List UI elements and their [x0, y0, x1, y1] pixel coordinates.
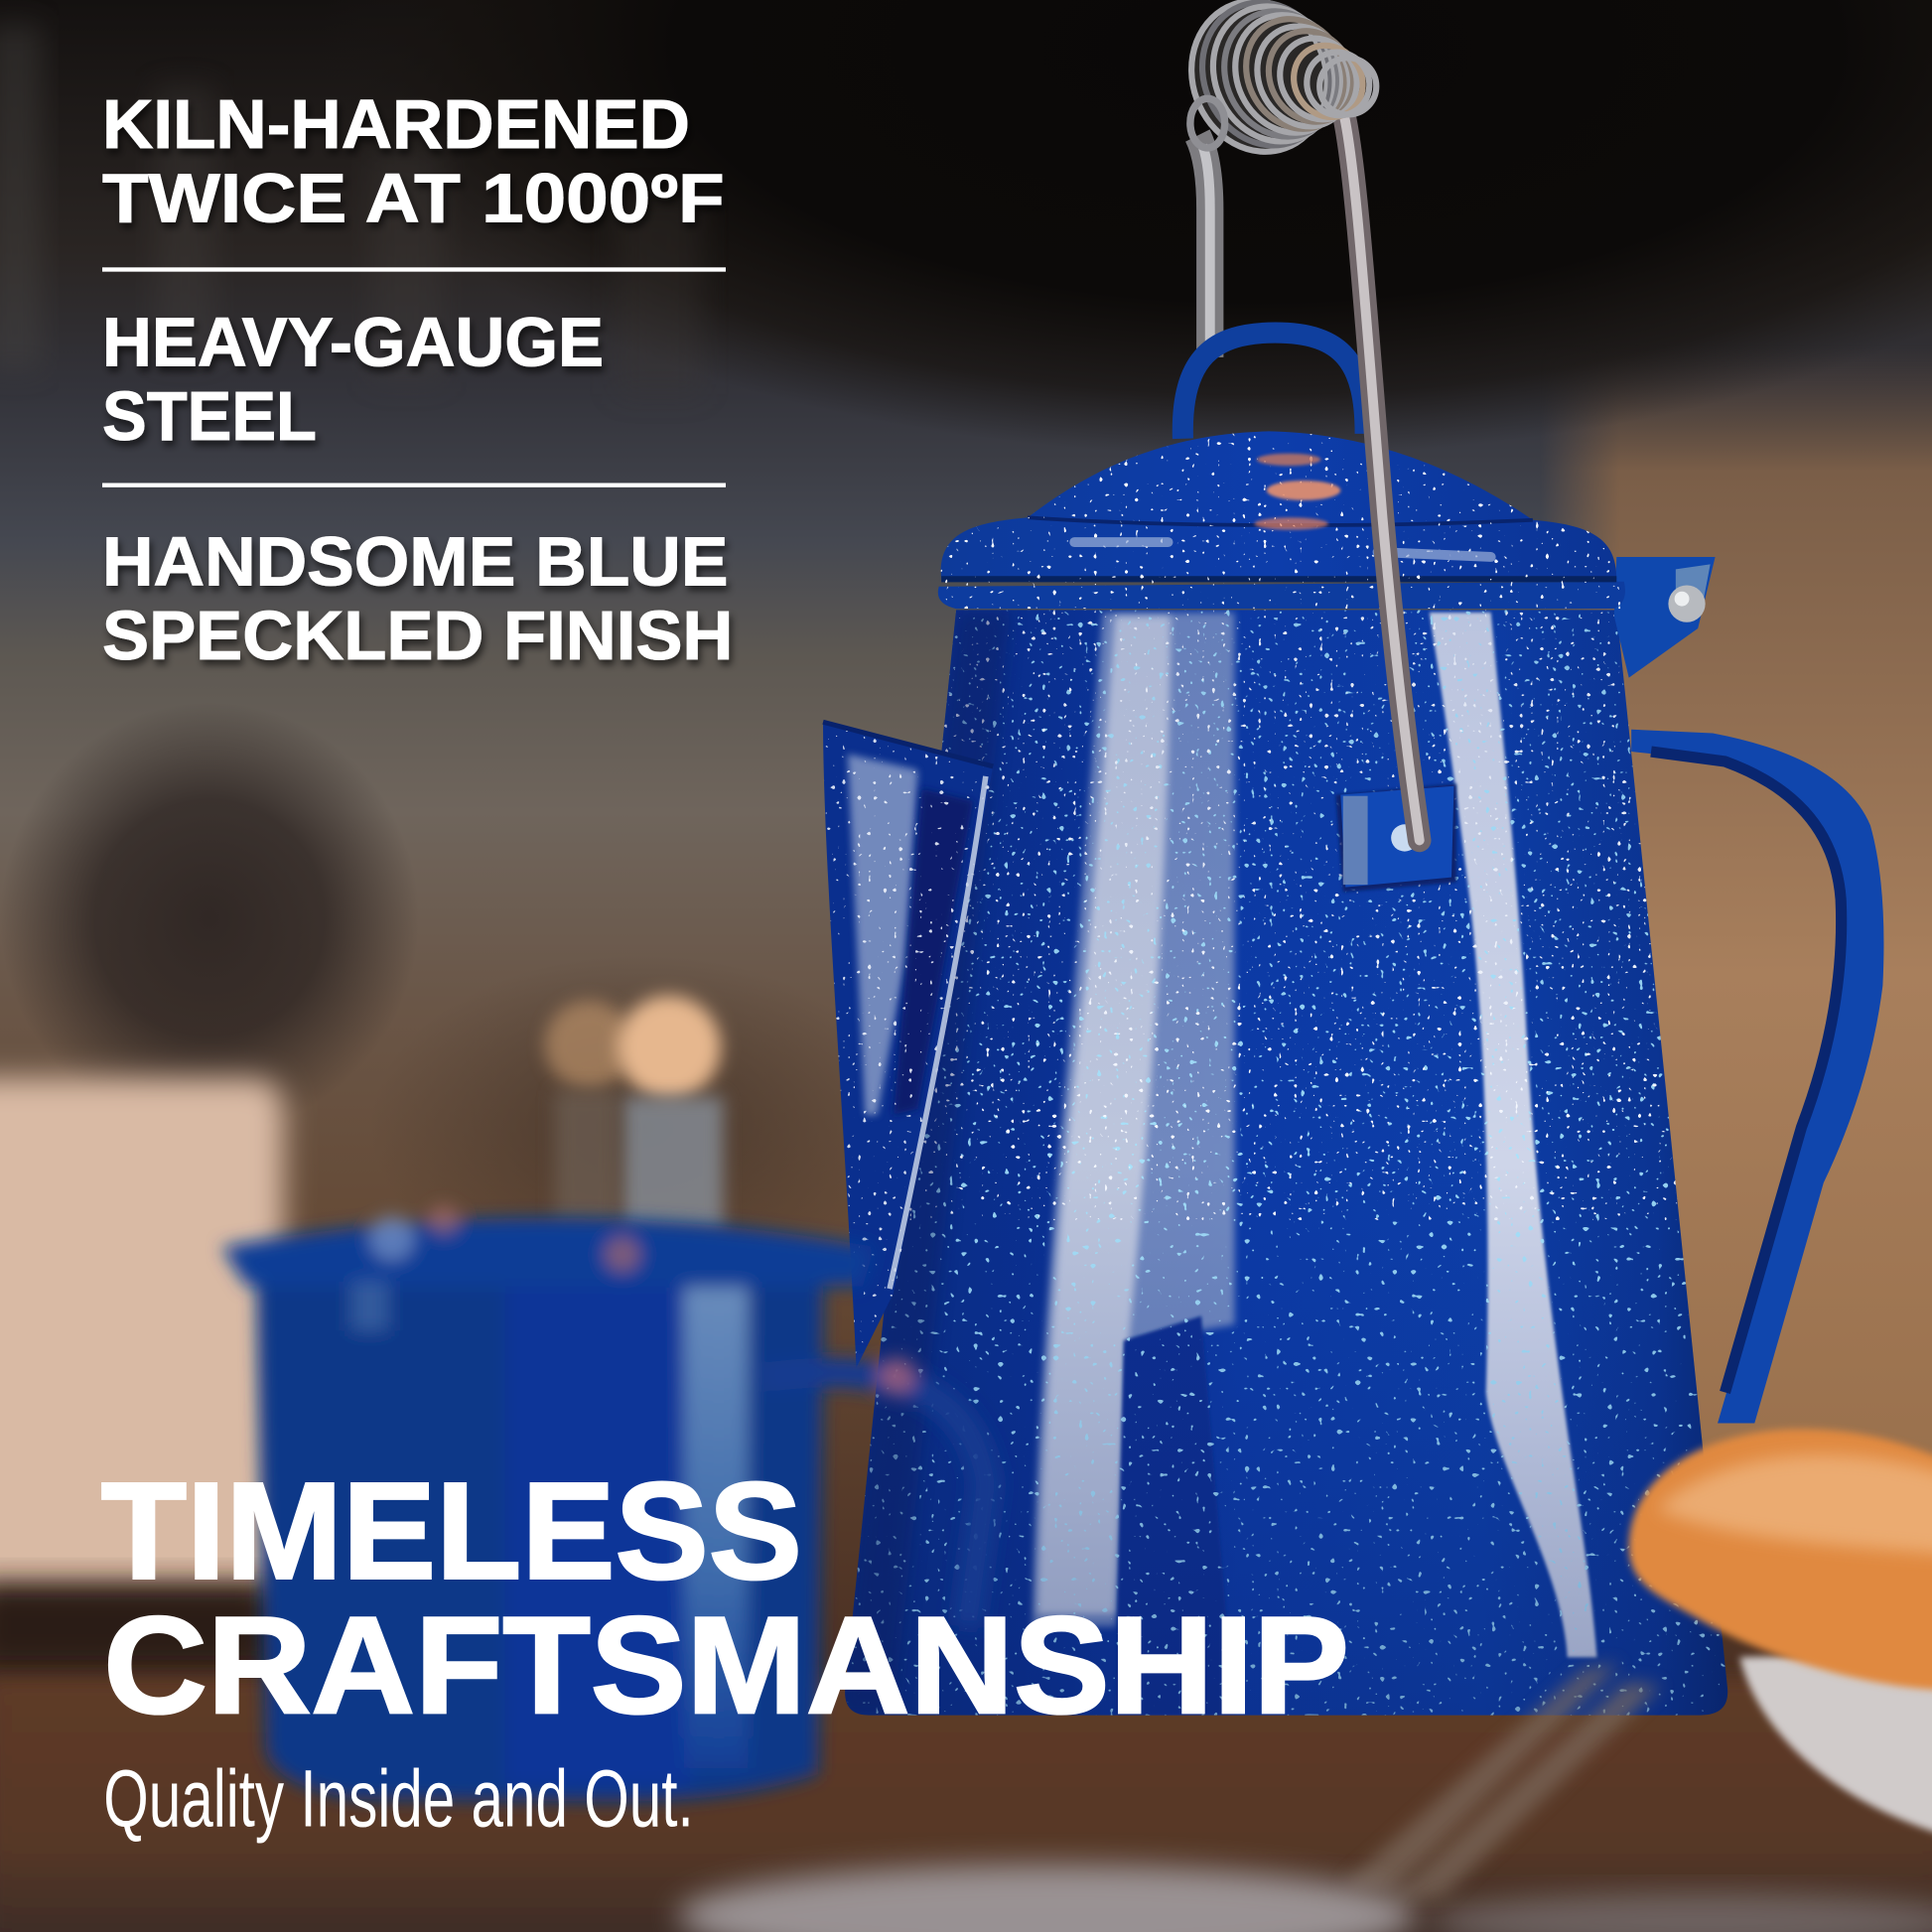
subheading: Quality Inside and Out.	[103, 1753, 694, 1844]
right reflection	[1430, 613, 1596, 1657]
bright core of left reflection	[1037, 617, 1171, 1614]
blurred fork and napkin	[678, 1663, 1932, 1932]
feature: kiln-hardened	[102, 85, 725, 236]
feature: kiln-hardened: KILN-HARDENED	[102, 85, 690, 163]
coffee pot	[813, 0, 1883, 1725]
pastry and plate	[1629, 1429, 1932, 1836]
feature: heavy-gauge steel: HEAVY-GAUGE	[102, 304, 604, 381]
icon: wire bail handle, front leg	[1343, 111, 1420, 840]
feature: blue speckled finish: SPECKLED FINISH	[102, 597, 733, 674]
feature: blue speckled finish	[102, 523, 733, 674]
icon: lid	[936, 333, 1716, 678]
icon: pot spout	[813, 715, 998, 1368]
icon: wire coil	[1171, 0, 1382, 171]
feature: heavy-gauge steel: STEEL	[102, 377, 317, 455]
main heading: TIMELESS	[101, 1454, 802, 1608]
bokeh lights behind mug	[545, 996, 724, 1232]
main heading: CRAFTSMANSHIP	[103, 1588, 1349, 1742]
feature: blue speckled finish: HANDSOME BLUE	[102, 523, 728, 601]
translucent left reflection	[1033, 613, 1235, 1626]
icon: wire bail handle, rear leg	[1197, 136, 1210, 357]
main heading	[101, 1454, 1349, 1742]
feature: heavy-gauge steel	[102, 304, 604, 455]
icon: riveted bracket	[1335, 783, 1456, 893]
icon: handle on the right	[1631, 730, 1883, 1423]
feature: kiln-hardened: TWICE AT 1000ºF	[102, 159, 725, 236]
feature list	[102, 85, 733, 674]
blurred mug	[221, 1205, 986, 1801]
icon: pot body	[838, 604, 1737, 1725]
